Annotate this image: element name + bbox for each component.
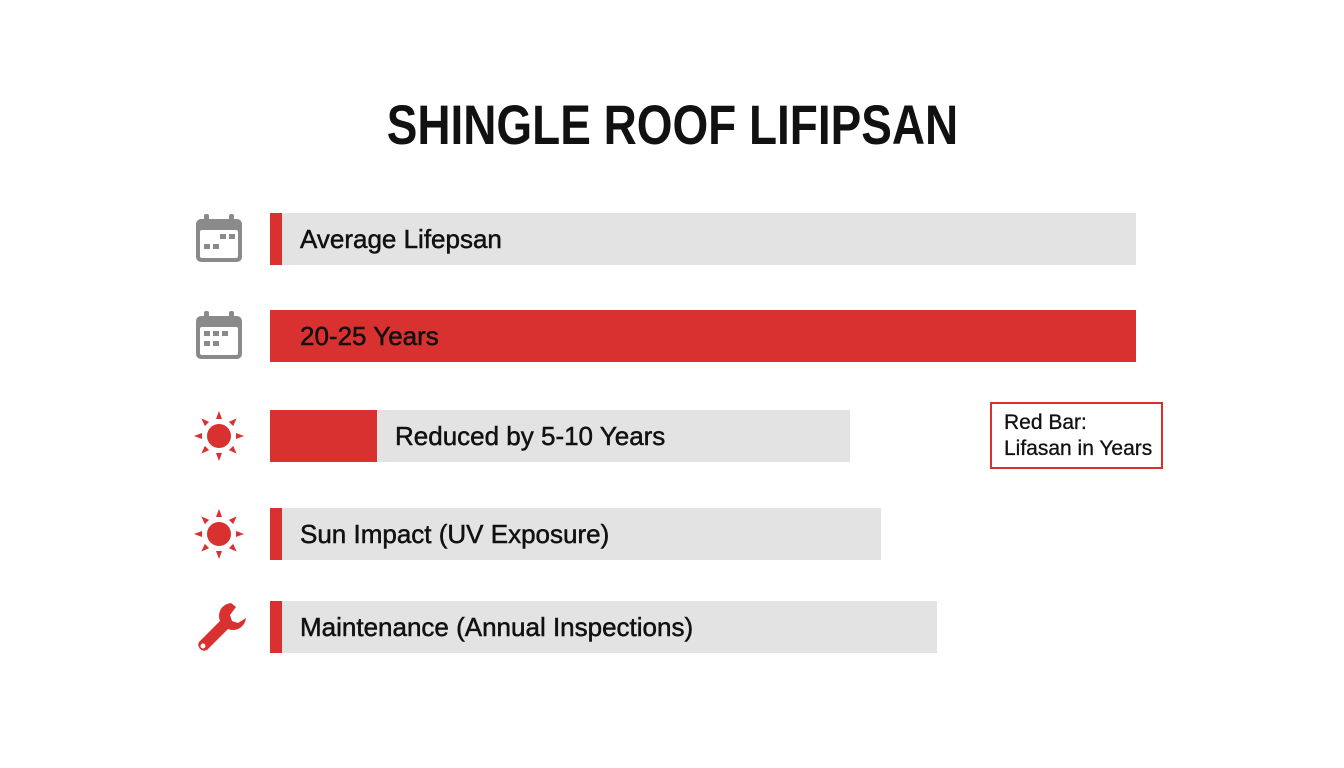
bar: 20-25 years: 20-25 Years <box>300 321 439 351</box>
bar: reduced <box>270 410 850 462</box>
legend: Red Bar: <box>1004 411 1087 434</box>
legend <box>990 402 1163 469</box>
icon: sun 1 <box>194 411 244 461</box>
legend: Lifasan in Years <box>1004 437 1152 460</box>
bar: reduced: Reduced by 5-10 Years <box>395 421 665 451</box>
title: SHINGLE ROOF LIFIPSAN <box>386 93 958 156</box>
icon: sun 2 <box>194 509 244 559</box>
icon: calendar 2 <box>196 311 242 359</box>
bar: sun impact: Sun Impact (UV Exposure) <box>300 519 609 549</box>
icon: calendar 1 <box>196 214 242 262</box>
icon: wrench <box>198 603 246 651</box>
bar: 20-25 years <box>270 310 1136 362</box>
bar: maintenance: Maintenance (Annual Inspections) <box>300 612 693 642</box>
bar: average lifespan <box>270 213 1136 265</box>
bar: average lifespan: Average Lifepsan <box>300 224 502 254</box>
bar: maintenance <box>270 601 937 653</box>
bar: sun impact <box>270 508 881 560</box>
